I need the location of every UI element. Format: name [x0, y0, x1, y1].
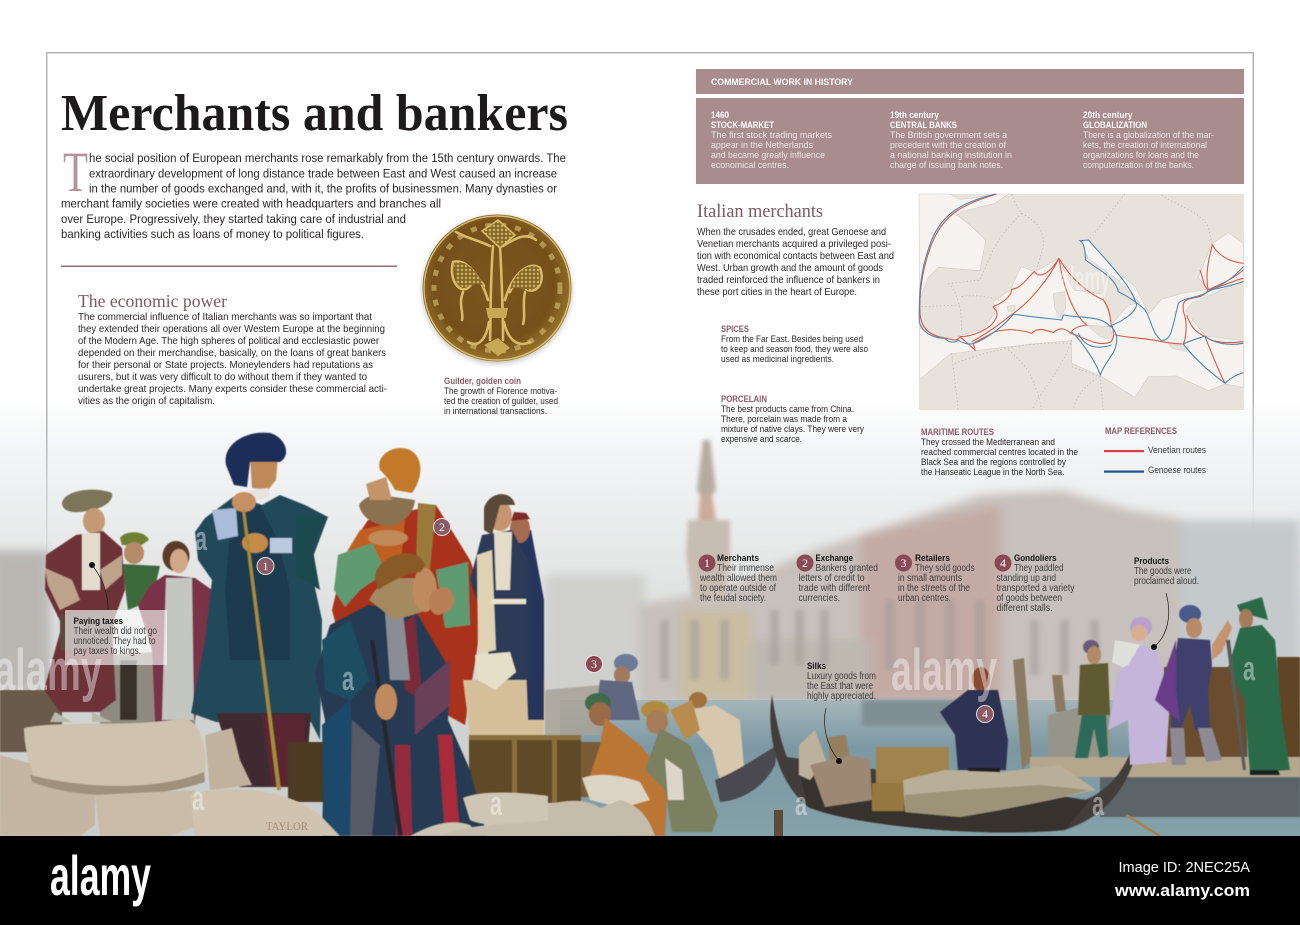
panel: commercial work in history — [696, 69, 1244, 184]
caption: exchange: Bankers granted — [816, 563, 878, 574]
figure: gondolier — [940, 667, 1008, 782]
callout: paying taxes: Paying taxes — [74, 616, 123, 627]
intro text block: in the number of goods exchanged and, with it, the profits of businessmen. Many dynasties or — [89, 182, 557, 196]
panel: the economic power — [78, 291, 387, 407]
column: globalization: There is a globalization of the mar- — [1083, 130, 1214, 141]
intro text block: he social position of European merchants rose remarkably from the 15th century onwards. The — [89, 151, 566, 165]
intro text block: banking activities such as loans of money to political figures. — [61, 227, 364, 241]
column: central banks: precedent with the creation of — [890, 140, 1006, 151]
body text: italian merchants — [697, 227, 894, 298]
crates behind the seated figure — [288, 685, 601, 803]
column: central banks: The British government sets a — [890, 130, 1008, 141]
figure: woman in lilac — [1108, 617, 1170, 765]
watermarks: a — [1243, 650, 1256, 688]
column: central banks: a national banking institution in — [890, 150, 1012, 161]
caption: guilder, golden coin: in international transactions. — [444, 406, 547, 416]
figure: bearded merchant in red robe — [332, 448, 485, 725]
text block: maritime routes — [921, 427, 1078, 478]
marker 2: 2 — [439, 520, 445, 534]
column: globalization: GLOBALIZATION — [1083, 120, 1147, 131]
figure: seated merchant in striped robe — [315, 553, 487, 836]
map: venetian routes — [920, 194, 1243, 383]
column: stock-market: economical centres. — [711, 160, 789, 171]
figure: young man with fan — [463, 494, 545, 735]
header text: COMMERCIAL WORK IN HISTORY — [711, 77, 854, 88]
map: dotted borders — [922, 194, 1212, 410]
divider rule — [61, 266, 397, 267]
marker 2 — [434, 518, 450, 536]
caption: exchange — [796, 553, 878, 604]
column: central banks: 19th century — [890, 110, 940, 121]
text block: porcelain: There, porcelain was made from a — [721, 414, 848, 425]
figures: dock workers — [585, 654, 778, 836]
watermarks: alamy — [1060, 260, 1110, 298]
callout: silks: highly appreciated. — [807, 691, 876, 702]
text block: maritime routes: Black Sea and the regions controlled by — [921, 457, 1066, 468]
figure: boy in green — [120, 532, 160, 720]
caption: merchants — [698, 553, 777, 604]
caption: exchange: 2 — [802, 556, 808, 570]
map: land islands — [1007, 292, 1188, 352]
body text: italian merchants: When the crusades ended, great Genoese and — [697, 227, 886, 238]
watermarks: a — [195, 520, 208, 558]
legend: map references: MAP REFERENCES — [1105, 426, 1177, 437]
body text: the economic power: of the Modern Age. The high spheres of political and ecclesiastic power — [78, 336, 380, 347]
body text: italian merchants: traded reinforced the influence of bankers in — [697, 275, 880, 286]
body text: italian merchants: tion with economical contacts between East and — [697, 251, 894, 262]
marker 4: 4 — [982, 707, 988, 721]
heading: italian merchants: Italian merchants — [697, 201, 823, 222]
timeline box — [696, 98, 1244, 184]
body text: italian merchants: Venetian merchants acquired a privileged posi- — [697, 239, 891, 250]
mooring post — [774, 810, 783, 836]
text block: spices: used as medicinal ingredients. — [721, 354, 834, 365]
figure: customer in olive — [1075, 640, 1110, 758]
pier posts — [1013, 658, 1066, 770]
background sacks on the pier — [1048, 707, 1110, 760]
figure: worker in olive — [641, 701, 718, 832]
caption: guilder, golden coin: ted the creation of guilder, used — [444, 396, 558, 406]
body text: the economic power: undertake great projects. Many experts consider these commercial acti- — [78, 384, 387, 395]
body text: the economic power — [78, 312, 387, 407]
figure: merchant with staff — [191, 433, 328, 790]
callout: paying taxes — [65, 562, 167, 665]
column: stock-market: STOCK-MARKET — [711, 120, 774, 131]
marker 4 — [976, 706, 994, 722]
caption: exchange: trade with different — [798, 583, 870, 594]
watermarks — [0, 260, 1256, 823]
sacks: foreground left — [0, 718, 340, 836]
oar — [1126, 815, 1160, 836]
page frame — [46, 52, 1254, 592]
pier — [1030, 657, 1300, 817]
text block: porcelain — [721, 394, 864, 445]
figure: retailer in blue — [595, 654, 640, 720]
legend: map references: Venetian routes — [1148, 445, 1206, 456]
column: central banks — [890, 110, 1012, 171]
intro text block: merchant family societies were created with headquarters and branches all — [61, 197, 441, 211]
text block: maritime routes: reached commercial centres located in the — [921, 447, 1078, 458]
legend: map references: Genoese routes — [1148, 465, 1206, 476]
intro text block: T — [63, 141, 88, 204]
logo: alamy: alamy — [50, 844, 151, 907]
cargo: sacks at the stern — [903, 765, 1096, 817]
marker 1 — [257, 558, 274, 574]
caption: retailers: in small amounts — [898, 573, 962, 584]
figure: woman in dress — [138, 541, 212, 722]
figure: man in green cloak — [1226, 597, 1290, 775]
caption: retailers: Retailers — [915, 553, 950, 564]
caption: merchants: wealth allowed them — [699, 573, 777, 584]
caption: gondoliers: Gondoliers — [1014, 553, 1056, 564]
map: sea areas — [919, 194, 1243, 397]
watermarks: a — [490, 785, 503, 823]
caption: gondoliers: of goods between — [996, 593, 1062, 604]
image id: Image ID: 2NEC25A — [1118, 859, 1250, 876]
column: globalization: kets, the creation of international — [1083, 140, 1207, 151]
body text: the economic power: The commercial influence of Italian merchants was so important that — [78, 312, 372, 323]
column: central banks: charge of issuing bank notes. — [890, 160, 1003, 171]
cargo: silk rolls — [810, 755, 872, 807]
marker 3: 3 — [591, 657, 597, 671]
figure: man in purple — [1155, 605, 1232, 765]
caption: gondoliers: different stalls. — [996, 603, 1052, 614]
column: globalization: organizations for loans and the — [1083, 150, 1199, 161]
watermarks: a — [342, 660, 355, 698]
caption: merchants: 1 — [704, 556, 710, 570]
callout: silks — [807, 661, 876, 764]
caption: gondoliers: 4 — [1000, 556, 1006, 570]
watermarks: alamy — [891, 638, 997, 703]
heading: the economic power: The economic power — [78, 291, 227, 311]
caption: exchange: currencies. — [798, 593, 840, 604]
column: globalization: computerization of the banks. — [1083, 160, 1194, 171]
callout: paying taxes: Their wealth did not go — [74, 626, 157, 637]
body text: the economic power: they extended their operations all over Western Europe at the beginning — [78, 324, 385, 335]
intro text block: over Europe. Progressively, they started taking care of industrial and — [61, 212, 406, 226]
sacks: foreground centre — [410, 775, 655, 836]
callout: paying taxes: unnoticed. They had to — [74, 636, 156, 647]
callout: products: Products — [1134, 556, 1169, 567]
text block: spices: SPICES — [721, 324, 749, 335]
caption: gondoliers: They paddled — [1014, 563, 1064, 574]
text block: porcelain: mixture of native clays. They were very — [721, 424, 864, 435]
body text: italian merchants: West. Urban growth and the amount of goods — [697, 263, 883, 274]
caption: gondoliers: standing up and — [996, 573, 1056, 584]
figures: background group on the left — [0, 490, 212, 752]
caption: retailers: urban centres. — [898, 593, 951, 604]
figure: man in cap — [44, 490, 125, 722]
intro text block: extraordinary development of long distance trade between East and West caused an increase — [89, 166, 557, 180]
column: stock-market: appear in the Netherlands — [711, 140, 813, 151]
caption: gondoliers: transported a variety — [996, 583, 1075, 594]
text block: porcelain: expensive and scarce. — [721, 434, 802, 445]
text block: porcelain: PORCELAIN — [721, 394, 767, 405]
legend: map references — [1104, 426, 1206, 476]
icon: golden guilder coin — [422, 214, 572, 362]
caption: merchants: the feudal society. — [700, 593, 766, 604]
callout: products: proclaimed aloud. — [1134, 576, 1199, 587]
text block: maritime routes: the Hanseatic League in the North Sea. — [921, 467, 1064, 478]
website: www.alamy.com — [1114, 881, 1250, 900]
text block: maritime routes: MARITIME ROUTES — [921, 427, 994, 438]
background painting: misty Venice — [0, 395, 1300, 836]
body text: the economic power: vities as the origin of capitalism. — [78, 396, 215, 407]
body text: italian merchants: these port cities in the heart of Europe. — [697, 287, 857, 298]
callout: silks: the East that were — [807, 681, 873, 692]
background: bell tower — [686, 440, 730, 600]
caption: exchange: letters of credit to — [798, 573, 865, 584]
body text: the economic power: for their personal or State projects. Moneylenders had reputations as — [78, 360, 373, 371]
caption: gondoliers — [994, 553, 1075, 614]
caption: guilder, golden coin: The growth of Florence motiva- — [444, 386, 557, 396]
column: central banks: CENTRAL BANKS — [890, 120, 957, 131]
column: globalization: 20th century — [1083, 110, 1133, 121]
callout: products — [1134, 556, 1199, 650]
caption: merchants: Merchants — [717, 553, 759, 564]
column: stock-market — [711, 110, 832, 171]
map: genoese routes — [919, 194, 1243, 383]
callout: silks: Luxury goods from — [807, 671, 876, 682]
caption: merchants: Their immense — [717, 563, 774, 574]
text: painter signature: TAYLOR — [266, 819, 308, 833]
caption: retailers: 3 — [900, 556, 906, 570]
figure: worker in orange — [585, 693, 668, 836]
caption: guilder, golden coin — [444, 376, 558, 416]
caption: retailers — [895, 553, 975, 604]
map: maritime routes — [919, 194, 1244, 410]
cargo: sacks at the bow — [799, 730, 826, 780]
background: distant dock — [862, 700, 957, 726]
column: stock-market: 1460 — [711, 110, 729, 121]
watermarks: a — [795, 785, 808, 823]
marker 1: 1 — [262, 559, 268, 573]
intro text block — [61, 141, 566, 241]
column: globalization — [1083, 110, 1214, 171]
watermarks: a — [192, 780, 205, 818]
figure: bent worker — [670, 692, 745, 788]
text block: spices: to keep and season food, they were also — [721, 344, 868, 355]
text block: porcelain: The best products came from China. — [721, 404, 854, 415]
column: stock-market: The first stock trading markets — [711, 130, 832, 141]
caption: exchange: Exchange — [816, 553, 853, 564]
marker 3 — [586, 656, 602, 672]
callout: paying taxes: pay taxes to kings. — [74, 646, 141, 657]
watermarks: a — [1092, 785, 1105, 823]
title: Merchants and bankers — [61, 85, 568, 142]
panel: italian merchants — [697, 201, 894, 445]
footer bar — [0, 836, 1300, 925]
column: stock-market: and became greatly influence — [711, 150, 825, 161]
caption: retailers: They sold goods — [915, 563, 975, 574]
gondola with goods — [770, 695, 1140, 832]
caption: guilder, golden coin: Guilder, golden coin — [444, 376, 521, 386]
cargo: crates — [876, 747, 949, 783]
text block: maritime routes: They crossed the Mediterranean and — [921, 437, 1055, 448]
text block: spices — [721, 324, 868, 365]
callout: silks: Silks — [807, 661, 826, 672]
caption: merchants: to operate outside of — [700, 583, 776, 594]
text block: spices: From the Far East. Besides being used — [721, 334, 863, 345]
body text: the economic power: depended on their merchandise, basically, on the loans of great bankers — [78, 348, 386, 359]
callout: products: The goods were — [1134, 566, 1192, 577]
header bar — [696, 69, 1244, 94]
caption: retailers: in the streets of the — [898, 583, 970, 594]
body text: the economic power: usurers, but it was very difficult to do without them if they wanted to — [78, 372, 367, 383]
boat: small gondola — [715, 745, 778, 802]
